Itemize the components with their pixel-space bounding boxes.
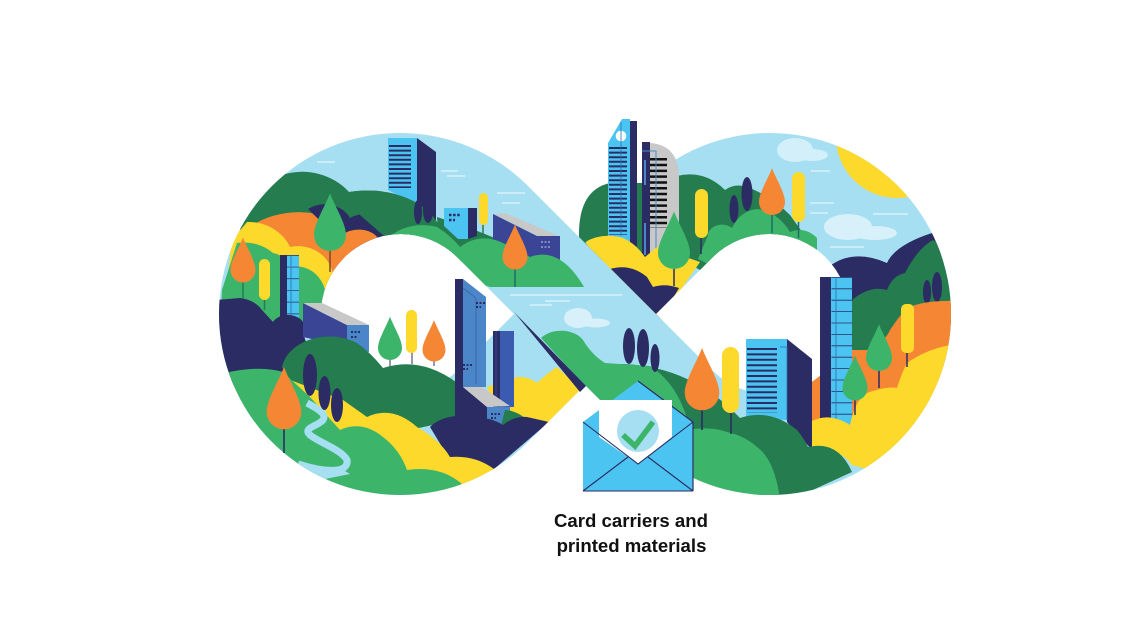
hill: green lower left bbox=[228, 368, 462, 495]
hill: yellow right bbox=[812, 345, 960, 470]
hole trees: green, yellow, orange bbox=[378, 310, 446, 367]
yellow pill tree one bbox=[695, 189, 708, 254]
hill: dark green lower left bbox=[282, 336, 456, 432]
envelope icon bbox=[583, 381, 693, 491]
green tree right one bbox=[866, 324, 892, 388]
navy hump over left building bbox=[273, 315, 303, 325]
navy tree pair right bbox=[923, 272, 942, 304]
orange tree upper left band bbox=[502, 224, 528, 287]
hill: orange right bbox=[808, 301, 955, 435]
sky streaks bbox=[317, 162, 908, 305]
hill: orange lobe bbox=[340, 230, 378, 262]
navy tree pair top bbox=[730, 177, 752, 223]
right loop hills bbox=[832, 233, 951, 368]
slanted building in left hole bbox=[303, 303, 369, 352]
check badge bbox=[617, 410, 659, 452]
hill: navy bottom centre bbox=[430, 416, 549, 470]
hill: dark green bottom right bbox=[620, 364, 852, 505]
tower right bbox=[820, 277, 852, 425]
orange tree bottom right bbox=[685, 348, 719, 430]
tall second building bbox=[493, 331, 514, 407]
caption: printed materials bbox=[557, 535, 706, 556]
orange tree top right bbox=[759, 168, 785, 233]
orange tree left bbox=[230, 238, 256, 298]
sky and left loop landscape bbox=[218, 133, 951, 495]
hill: yellow centre bbox=[585, 236, 700, 320]
hill: small dark green bbox=[502, 410, 524, 425]
band hill: yellow lower crossing bbox=[487, 367, 579, 429]
cloud: upper right bbox=[777, 138, 828, 162]
orange tree lower left bbox=[267, 367, 301, 453]
yellow pill tree bottom right bbox=[722, 347, 739, 434]
letter bbox=[599, 400, 672, 464]
hill: green centre left bbox=[393, 225, 584, 287]
hill: navy centre bbox=[610, 267, 679, 320]
hill: yellow left bbox=[228, 222, 332, 294]
infinity loop infographic bbox=[218, 119, 951, 556]
hill: green bottom right bbox=[680, 428, 780, 500]
hill: yellow lower left bbox=[292, 380, 494, 492]
hill: green left bbox=[220, 242, 326, 335]
hill: green crossing lobe bbox=[541, 331, 690, 500]
top-left tower bbox=[388, 138, 436, 220]
hill: dark green upper left bbox=[240, 172, 465, 300]
hill: navy right bbox=[832, 233, 942, 300]
green tree right two bbox=[842, 356, 868, 415]
hill: dark green right of towers bbox=[665, 174, 815, 270]
mid building striped bbox=[746, 339, 812, 450]
cloud: crossing bbox=[564, 308, 610, 328]
navy sliver bbox=[514, 312, 586, 392]
hill: navy lower left bbox=[219, 298, 306, 385]
small blue building bbox=[444, 208, 477, 239]
green tree upper left bbox=[314, 193, 346, 272]
tower one with white circle bbox=[608, 119, 637, 248]
navy trees lower left bbox=[303, 354, 343, 422]
lower left landscape bbox=[228, 368, 548, 495]
navy trees crossing bbox=[623, 328, 660, 372]
hill: dark green behind towers bbox=[579, 183, 660, 260]
hill: low green bbox=[698, 209, 817, 264]
river bbox=[298, 403, 347, 470]
yellow pill tree right bbox=[901, 304, 914, 367]
hill: dark green behind small buildings bbox=[437, 217, 493, 262]
yellow pill tree left bbox=[259, 259, 270, 310]
sun bbox=[836, 146, 908, 198]
caption bbox=[554, 510, 708, 556]
left building behind hole bbox=[280, 255, 299, 327]
top right landscape bbox=[585, 119, 817, 320]
hill: dark green right bbox=[852, 240, 951, 368]
cloud: middle right bbox=[824, 214, 897, 240]
dark green hump over tower bbox=[349, 190, 438, 242]
hill: navy ridge bbox=[308, 204, 392, 250]
tall building bbox=[455, 279, 510, 430]
yellow pill tree two bbox=[792, 172, 805, 238]
hill: orange upper left bbox=[256, 212, 370, 297]
yellow pill tree top bbox=[479, 193, 488, 238]
slanted building top bbox=[493, 213, 560, 262]
caption: Card carriers and bbox=[554, 510, 708, 531]
green tree top centre bbox=[658, 211, 690, 286]
navy trees by top tower bbox=[414, 197, 433, 224]
tower two grey rounded bbox=[642, 142, 679, 262]
